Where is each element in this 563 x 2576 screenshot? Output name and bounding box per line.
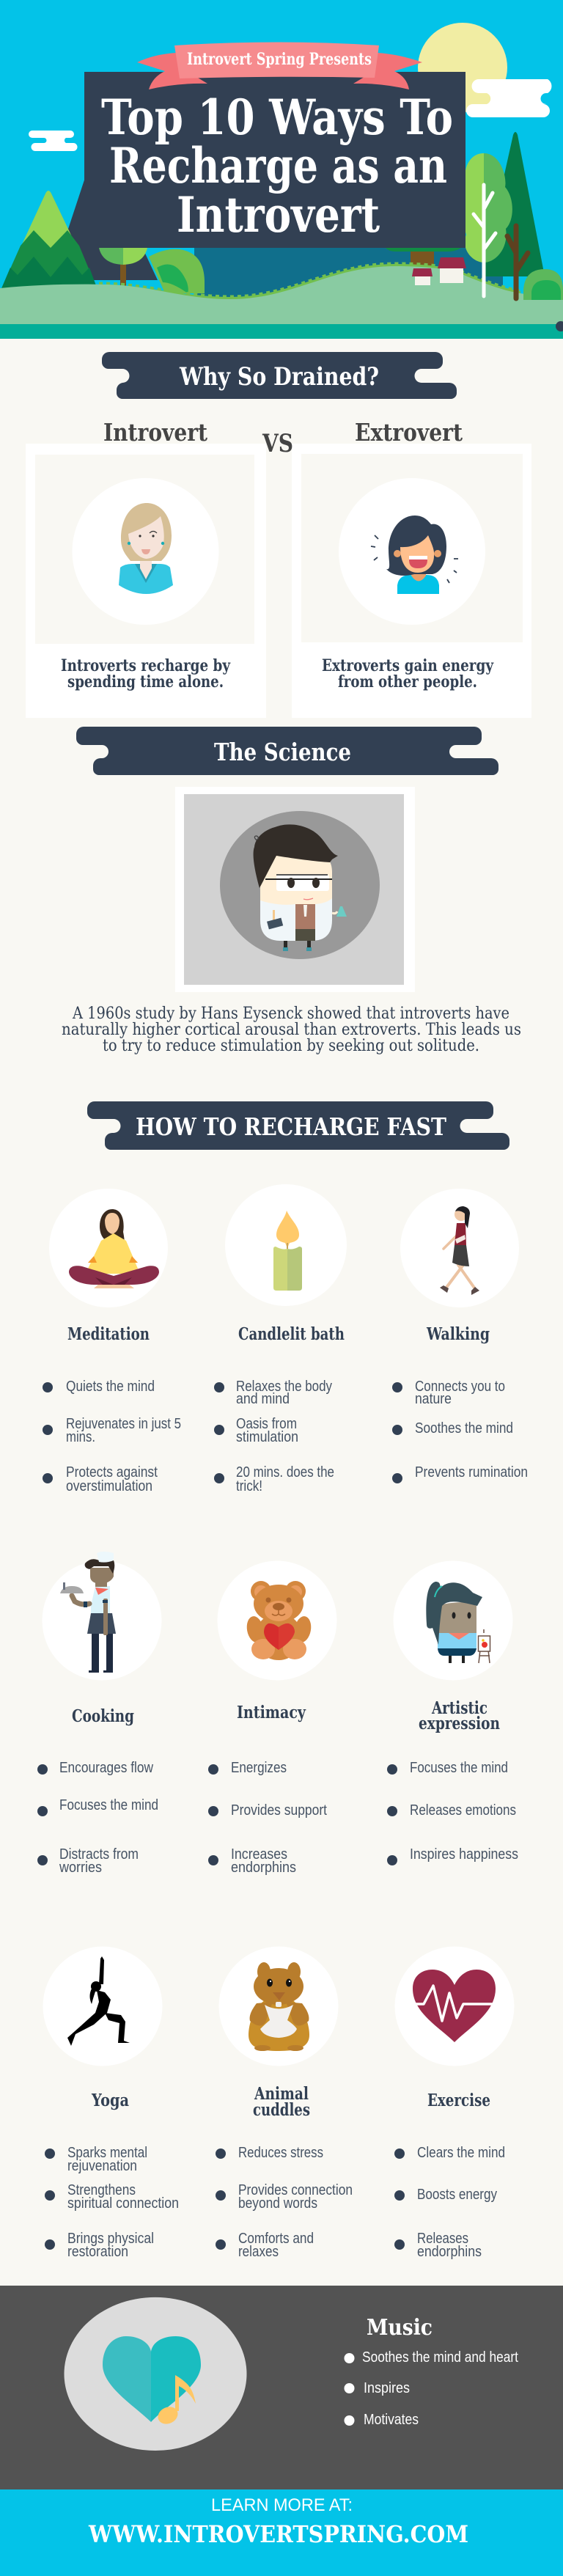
text: extrovert caption	[322, 656, 494, 691]
panel: meditation	[43, 1189, 181, 1494]
icon: scientist	[254, 824, 347, 951]
list: cooking benefits: Focuses the mind	[59, 1797, 158, 1813]
title board: Recharge as an	[109, 137, 447, 194]
list: yoga benefits	[45, 2144, 179, 2260]
list: intimacy benefits	[208, 1759, 327, 1876]
title: Music: Music	[367, 2315, 433, 2341]
icon: chef	[60, 1552, 116, 1673]
panel: animal cuddles	[216, 1946, 353, 2260]
panel: walking	[392, 1189, 528, 1483]
list: yoga benefits: Sparks mental	[67, 2144, 147, 2161]
large house	[438, 257, 466, 283]
icon: meditating woman	[69, 1209, 159, 1288]
title: Meditation: Meditation	[67, 1324, 150, 1344]
title: Candlelit bath: Candlelit bath	[238, 1324, 345, 1344]
list: music benefits	[345, 2349, 518, 2428]
panel: artistic expression	[387, 1560, 518, 1865]
brown bare tree	[507, 226, 528, 298]
icon: right cloud	[466, 79, 551, 117]
panel: introvert card	[26, 444, 266, 718]
list: yoga benefits: restoration	[67, 2243, 128, 2260]
list: candlelit bath benefits: 20 mins. does the	[236, 1464, 334, 1480]
text: learn more at: LEARN MORE AT:	[211, 2495, 353, 2515]
list: meditation benefits: Protects against	[66, 1464, 158, 1480]
panel: extrovert card	[292, 444, 531, 718]
list: cooking benefits: worries	[59, 1859, 102, 1876]
list: meditation benefits: mins.	[66, 1428, 95, 1445]
banner: The Science	[76, 727, 498, 775]
footer	[0, 2489, 563, 2576]
text: science paragraph: naturally higher cortical arousal than extroverts. This leads us	[62, 1021, 521, 1039]
heading: Introvert: Introvert	[103, 418, 208, 447]
list: artistic expression benefits: Focuses the mind	[410, 1759, 508, 1776]
title board: Top 10 Ways To	[101, 89, 453, 146]
sparkle marks	[371, 535, 458, 583]
title: Walking: Walking	[426, 1324, 490, 1344]
ribbon: Introvert Spring Presents: Introvert Spring Presents	[187, 50, 372, 69]
panel: candlelit bath	[214, 1184, 347, 1494]
title board	[84, 72, 466, 248]
panel: music	[0, 2286, 563, 2489]
list: candlelit bath benefits	[214, 1378, 334, 1494]
list: artistic expression benefits: Releases emotions	[410, 1802, 516, 1819]
list: exercise benefits: Boosts energy	[417, 2186, 498, 2203]
title board: Introvert	[177, 186, 380, 243]
icon: heart with music note	[103, 2336, 201, 2427]
icon: left cloud	[29, 131, 78, 151]
list: walking benefits: Connects you to	[415, 1378, 505, 1395]
icon: artist with easel	[426, 1582, 490, 1663]
panel: exercise	[394, 1946, 515, 2260]
list: exercise benefits: Clears the mind	[417, 2144, 505, 2161]
list: walking benefits: nature	[415, 1390, 452, 1407]
list: cooking benefits	[37, 1759, 158, 1876]
list: candlelit bath benefits: and mind	[236, 1390, 290, 1407]
icon: teddy bear with heart	[245, 1581, 313, 1660]
icon: heart with pulse line	[413, 1970, 496, 2042]
back dark mountain	[51, 147, 158, 280]
list: candlelit bath benefits: stimulation	[236, 1428, 298, 1445]
list: yoga benefits: spiritual connection	[67, 2195, 179, 2212]
text: science paragraph	[62, 1005, 521, 1055]
heading: Extrovert: Extrovert	[355, 418, 463, 447]
panel: cooking	[37, 1552, 161, 1876]
text: extrovert caption: Extroverts gain energy	[322, 656, 494, 675]
panel: intimacy	[208, 1560, 337, 1876]
text: introvert caption	[61, 656, 231, 691]
label: VS: VS	[262, 429, 293, 458]
title: Animal cuddles	[253, 2084, 310, 2120]
banner: How to recharge fast: HOW TO RECHARGE FAST	[136, 1112, 446, 1141]
text: science paragraph: to try to reduce stimulation by seeking out solitude.	[103, 1037, 479, 1055]
list: yoga benefits: Brings physical	[67, 2230, 154, 2247]
banner: Why So Drained?: Why So Drained?	[179, 362, 379, 392]
left small tree	[99, 248, 147, 299]
tree behind board	[384, 242, 463, 271]
list: cooking benefits: Distracts from	[59, 1846, 139, 1863]
list: animal cuddles benefits: beyond words	[238, 2195, 317, 2212]
title: Artistic expression	[419, 1698, 500, 1733]
list: intimacy benefits: endorphins	[231, 1859, 296, 1876]
list: animal cuddles benefits: Provides connection	[238, 2181, 353, 2198]
easel	[478, 1629, 490, 1663]
list: walking benefits: Prevents rumination	[415, 1464, 528, 1480]
list: walking benefits: Soothes the mind	[415, 1420, 513, 1436]
icon: extrovert woman	[371, 515, 458, 594]
list: music benefits: Motivates	[364, 2411, 419, 2428]
text: website: WWW.INTROVERTSPRING.COM	[88, 2520, 468, 2548]
text: introvert caption: spending time alone.	[67, 672, 224, 691]
right bush	[523, 269, 563, 300]
list: candlelit bath benefits: Oasis from	[236, 1415, 297, 1432]
list: meditation benefits	[43, 1378, 181, 1494]
icon: introvert woman	[119, 503, 173, 594]
title: Animal cuddles: cuddles	[253, 2100, 310, 2120]
list: animal cuddles benefits	[216, 2144, 353, 2260]
list: animal cuddles benefits: relaxes	[238, 2243, 279, 2260]
list: candlelit bath benefits: Relaxes the body	[236, 1378, 333, 1395]
title: Artistic expression: Artistic	[431, 1698, 487, 1718]
icon: yoga pose silhouette	[67, 1956, 130, 2046]
list: exercise benefits: Releases	[417, 2230, 468, 2247]
list: walking benefits	[392, 1378, 528, 1483]
left bush	[149, 249, 205, 293]
lake	[194, 242, 503, 297]
list: yoga benefits: Strengthens	[67, 2181, 136, 2198]
title: Intimacy: Intimacy	[237, 1703, 306, 1722]
title: Yoga: Yoga	[91, 2091, 129, 2110]
ribbon: Introvert Spring Presents	[137, 43, 422, 89]
title: Animal cuddles: Animal	[254, 2084, 309, 2104]
list: music benefits: Inspires	[364, 2379, 410, 2396]
panel: scientist portrait	[175, 787, 415, 992]
banner: How to recharge fast	[87, 1101, 509, 1150]
header landscape illustration	[0, 0, 563, 339]
list: music benefits: Soothes the mind and heart	[362, 2349, 518, 2366]
list: intimacy benefits: Provides support	[231, 1802, 327, 1819]
list: candlelit bath benefits: trick!	[236, 1478, 262, 1494]
hill edge	[99, 265, 520, 298]
light green tree	[462, 153, 512, 296]
tall dark tree	[482, 132, 545, 276]
left layered mountain tree	[0, 191, 99, 296]
list: meditation benefits: Quiets the mind	[66, 1378, 155, 1395]
list: animal cuddles benefits: Comforts and	[238, 2230, 314, 2247]
teal band	[0, 324, 563, 339]
icon: candle	[273, 1211, 302, 1291]
list: exercise benefits	[394, 2144, 505, 2260]
list: meditation benefits: overstimulation	[66, 1478, 152, 1494]
text: extrovert caption: from other people.	[338, 672, 477, 691]
list: meditation benefits: Rejuvenates in just 5	[66, 1415, 181, 1432]
text: introvert caption: Introverts recharge by	[61, 656, 231, 675]
list: intimacy benefits: Energizes	[231, 1759, 287, 1776]
banner: Why So Drained?	[102, 352, 457, 399]
list: animal cuddles benefits: Reduces stress	[238, 2144, 323, 2161]
icon: sun	[418, 23, 507, 112]
icon: hamster	[249, 1962, 309, 2051]
list: yoga benefits: rejuvenation	[67, 2157, 137, 2174]
list: artistic expression benefits: Inspires happiness	[410, 1846, 518, 1863]
panel: yoga	[43, 1946, 179, 2260]
title: Cooking: Cooking	[72, 1706, 134, 1726]
list: cooking benefits: Encourages flow	[59, 1759, 153, 1776]
title: Exercise: Exercise	[427, 2091, 490, 2110]
small house	[412, 268, 433, 285]
text: science paragraph: A 1960s study by Hans Eysenck showed that introverts have	[72, 1005, 509, 1023]
ground hill	[0, 266, 563, 326]
list: intimacy benefits: Increases	[231, 1846, 287, 1863]
list: artistic expression benefits	[387, 1759, 518, 1865]
list: exercise benefits: endorphins	[417, 2243, 482, 2260]
icon: walking woman	[440, 1206, 479, 1295]
title: Artistic expression: expression	[419, 1714, 500, 1733]
banner: The Science: The Science	[214, 738, 351, 766]
